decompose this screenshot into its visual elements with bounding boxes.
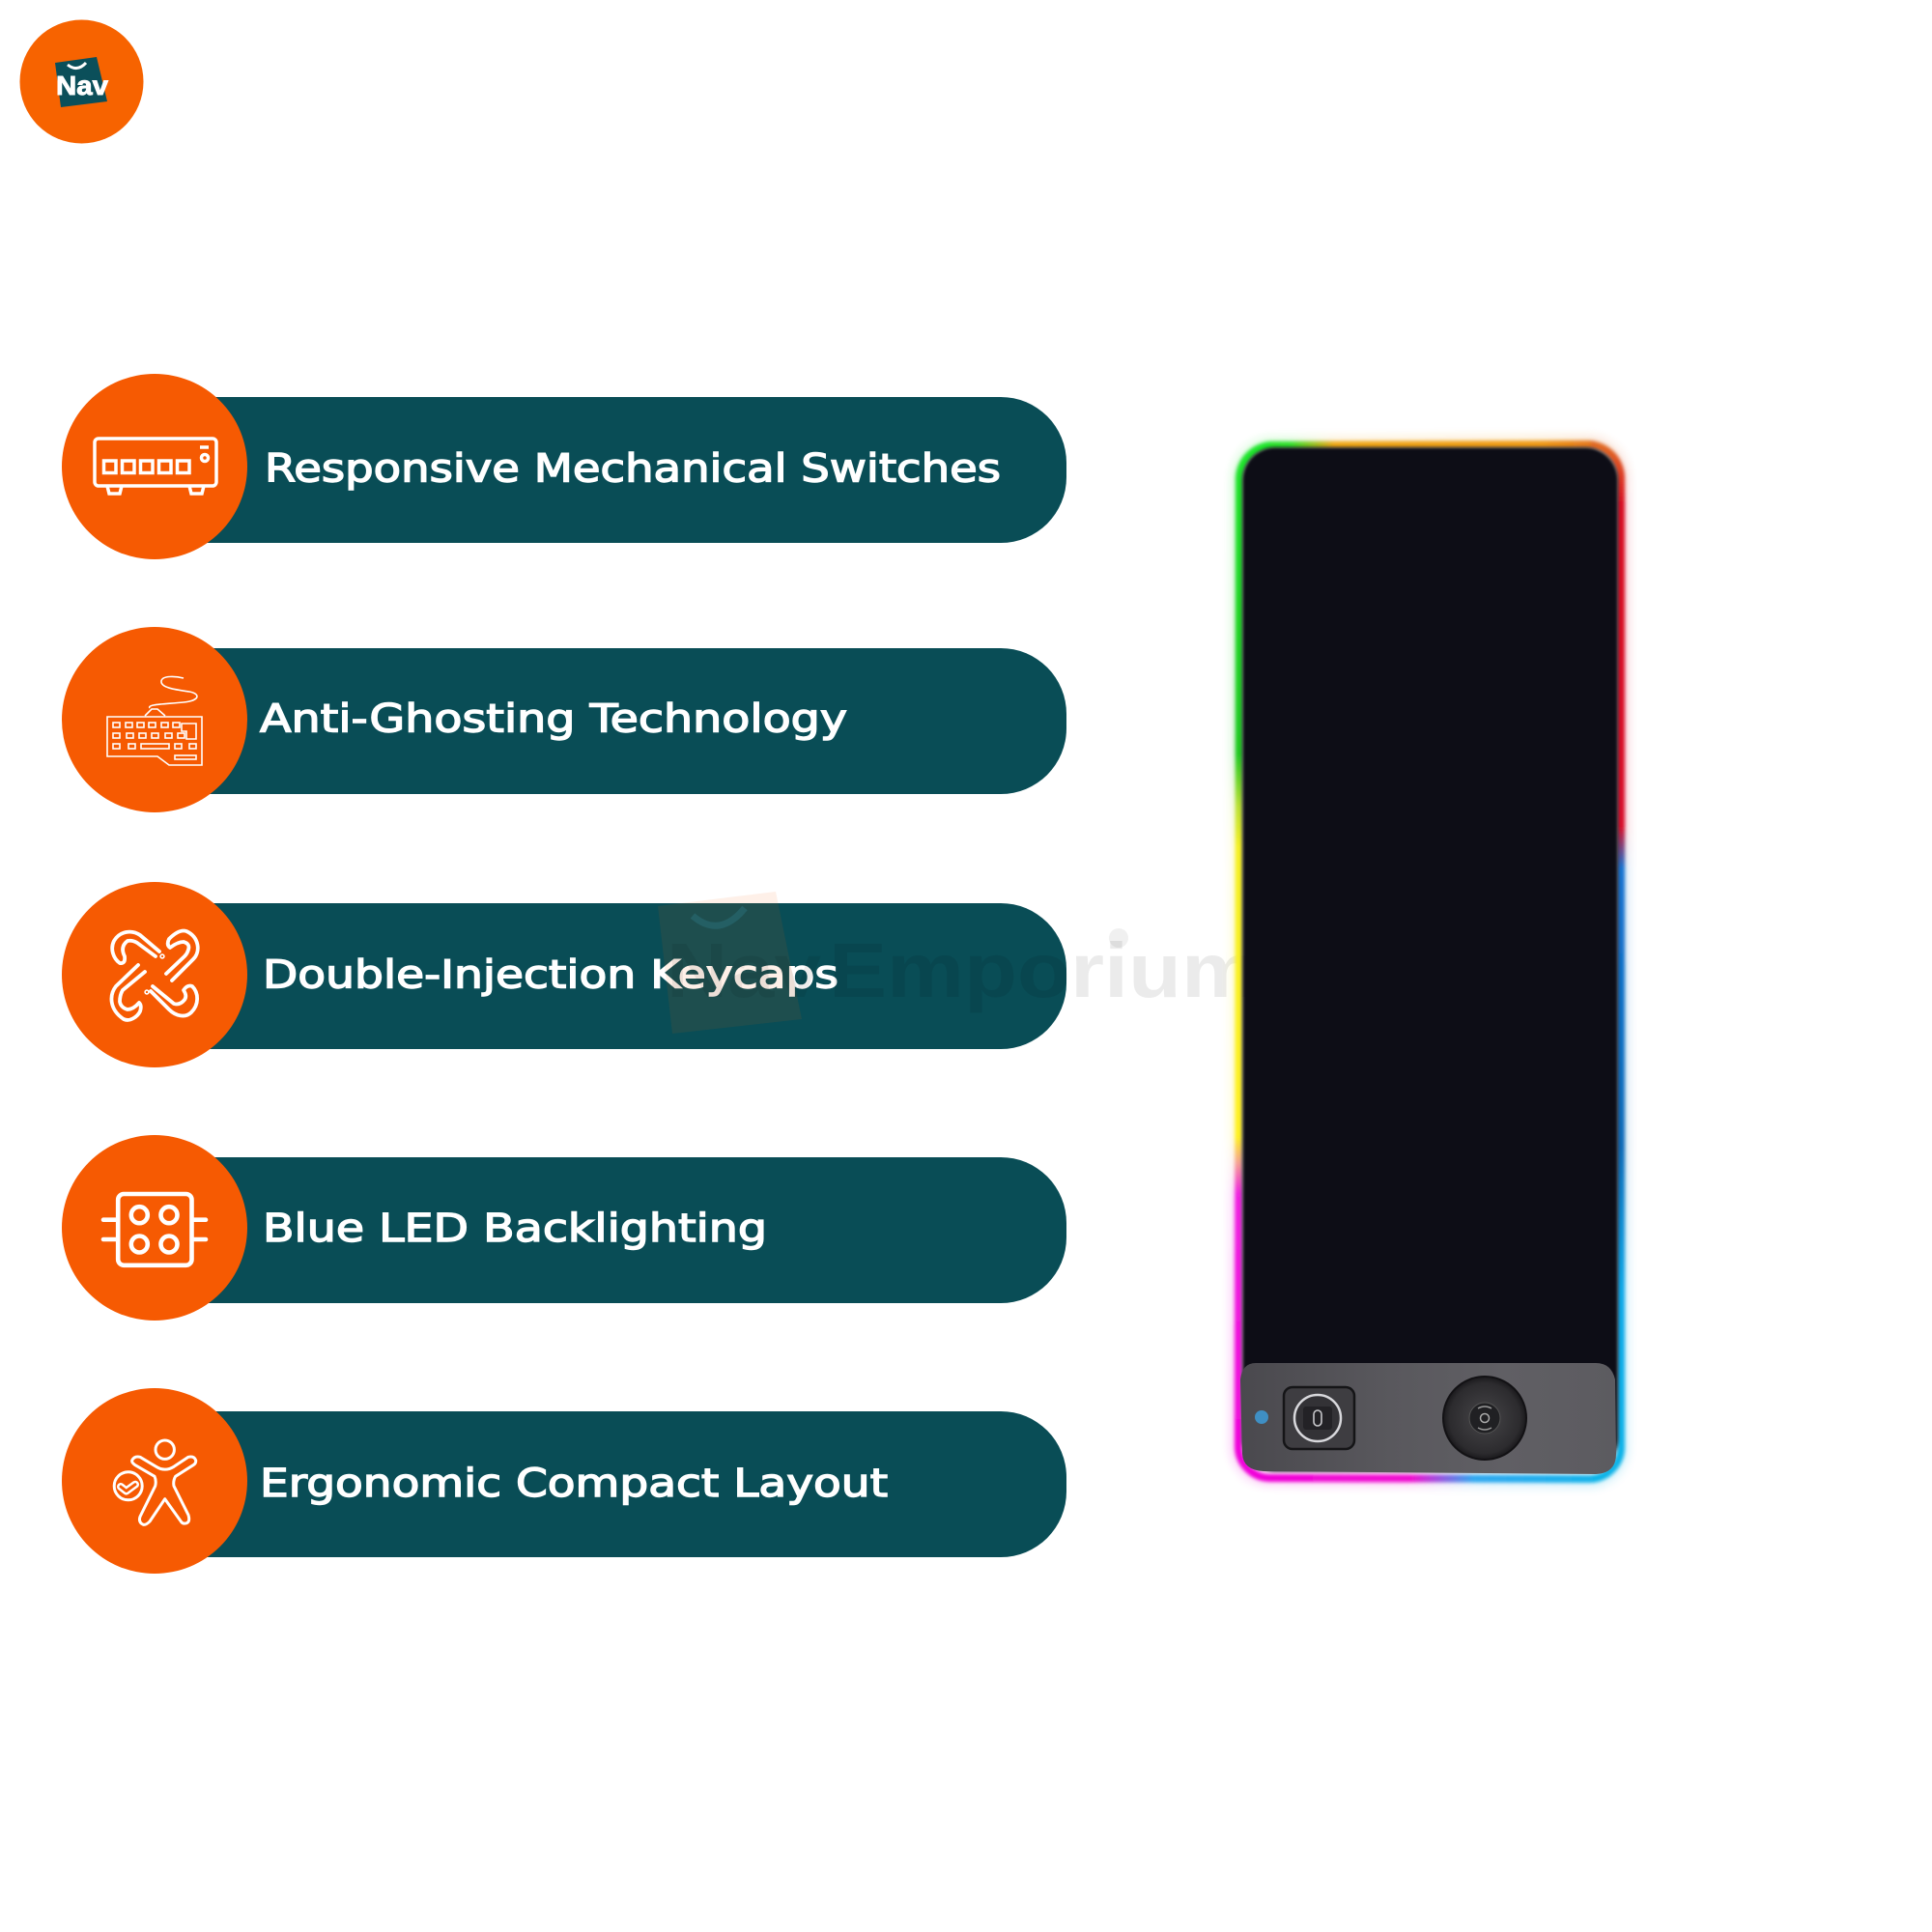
panel: anti-ghosting technology (62, 627, 1066, 812)
panel: responsive mechanical switches (62, 374, 1066, 559)
icon: interlocking links (111, 931, 198, 1020)
product: RGB desk mat (1236, 442, 1622, 1481)
watermark: Nav Emporium: Emporium (829, 927, 1259, 1013)
control panel (1240, 1363, 1616, 1474)
label: responsive mechanical switches: Responsive Mechanical Switches (265, 446, 1001, 491)
panel: blue led backlighting (62, 1135, 1066, 1321)
logo: Nav badge (19, 19, 143, 143)
panel: ergonomic compact layout (62, 1388, 1066, 1574)
status led (1255, 1410, 1268, 1424)
wireless charging pad (1443, 1377, 1526, 1460)
rgb glow border (1236, 442, 1622, 1481)
square button (1284, 1387, 1354, 1449)
icon: network switch box (95, 439, 216, 494)
mat surface (1242, 447, 1618, 1471)
watermark: Nav Emporium (658, 892, 1259, 1034)
icon: led chip (103, 1194, 206, 1265)
logo: Nav badge: Nav (56, 71, 108, 100)
icon: wired keyboard (107, 676, 202, 765)
watermark: Nav Emporium: Nav (667, 927, 822, 1013)
label: anti-ghosting technology: Anti-Ghosting Technology (260, 697, 847, 742)
label: double-injection keycaps: Double-Injection Keycaps (263, 952, 838, 997)
label: blue led backlighting: Blue LED Backlighting (263, 1207, 767, 1251)
panel: double-injection keycaps (62, 882, 1066, 1067)
label: ergonomic compact layout: Ergonomic Compact Layout (260, 1462, 888, 1506)
icon: ergonomic figure with check (114, 1440, 196, 1524)
